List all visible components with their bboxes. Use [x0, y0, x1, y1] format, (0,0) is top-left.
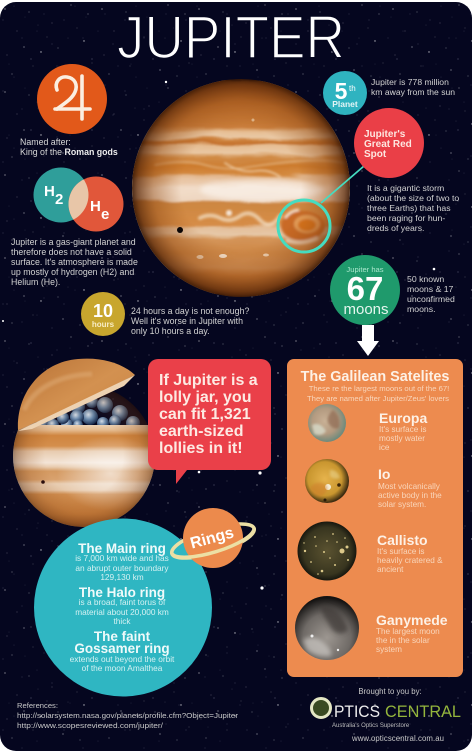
moon: Europa: It's surface is — [379, 425, 427, 434]
logo: Optics Central: www.opticscentral.com.au — [351, 734, 444, 743]
moon: Ganymede: the in the solar — [376, 636, 430, 645]
moon: Europa: Europa — [379, 410, 427, 426]
venn: hydrogen and helium — [34, 168, 124, 232]
venn: hydrogen and helium: H — [44, 183, 55, 200]
text: references: References: — [17, 701, 58, 710]
lower body — [13, 392, 154, 527]
text: distance from sun: Jupiter is 778 million — [371, 77, 449, 87]
callout: lolly jar speech bubble: If Jupiter is a — [159, 372, 258, 389]
text: day length: 24 hours a day is not enough? — [131, 306, 249, 316]
moon: Io: solar system. — [378, 500, 426, 509]
text: gas giant description: up mostly of hydrogen (H2) and — [11, 267, 134, 277]
badge: Great Red Spot: Jupiter's — [364, 129, 406, 140]
badge: 10 hours: 10 — [93, 301, 113, 321]
badge: 5th planet: th — [349, 84, 356, 93]
text: day length: Well it's worse in Jupiter with — [131, 316, 243, 326]
venn: hydrogen and helium: 2 — [55, 191, 63, 208]
title: JUPITER — [117, 4, 345, 71]
badge: Jupiter symbol — [37, 64, 107, 134]
callout: Great Red Spot pointer ring — [278, 166, 364, 252]
text: known moons: moons. — [407, 304, 436, 314]
badge: Great Red Spot: Great Red — [364, 139, 412, 150]
moon: Io: active body in the — [378, 491, 442, 500]
badge: 5th planet: 5 — [335, 78, 348, 104]
red spot — [281, 210, 325, 243]
illustration: Jupiter lolly jar — [10, 359, 160, 530]
badge: 5th planet: Planet — [332, 99, 358, 109]
logo: Optics Central: CENTRAL — [385, 702, 461, 721]
logo: Optics Central: PTICS — [334, 702, 380, 721]
callout: lolly jar speech bubble: lollies in it! — [159, 440, 243, 457]
moon: Ganymede: system — [376, 645, 402, 654]
panel: rings — [34, 518, 212, 696]
badge: 67 moons: 67 — [347, 270, 383, 307]
callout: lolly jar speech bubble: earth-sized — [159, 423, 243, 440]
earth lollies — [26, 396, 140, 434]
text: gas giant description: Helium (He). — [11, 277, 60, 287]
badge: 5th planet — [323, 71, 367, 115]
logo: Optics Central: Australia's Optics Superstore — [332, 723, 410, 729]
badge: 10 hours: hours — [92, 320, 115, 329]
moon: Europa — [308, 404, 427, 452]
badge: Great Red Spot — [354, 108, 424, 178]
moon: Callisto: It's surface is — [377, 547, 425, 556]
panel: Galilean satellites: They are named after Jupiter/Zeus' lovers — [307, 394, 449, 403]
icon: ringed planet — [168, 508, 258, 568]
text: storm description: three Earths) that has — [367, 203, 451, 213]
callout: lolly jar speech bubble: lolly jar, you — [159, 389, 251, 406]
panel: rings: material about 20,000 km — [75, 607, 169, 617]
text: gas giant description: therefore does not have a solid — [11, 247, 132, 257]
moon: Europa: ice — [379, 443, 390, 452]
panel: rings: Gossamer ring — [74, 641, 170, 656]
callout: lolly jar speech bubble — [148, 359, 271, 484]
text: gas giant description: Jupiter is a gas-giant planet and — [11, 237, 136, 247]
text: storm description: (about the size of two to — [367, 193, 459, 203]
panel: rings: The Main ring — [78, 541, 166, 556]
icon: ringed planet: Rings — [188, 524, 236, 552]
logo: Optics Central — [312, 687, 461, 743]
panel: Galilean satellites: These re the largest moons out of the 67! — [309, 384, 449, 393]
panel: rings: The Halo ring — [79, 585, 165, 600]
panel: rings: The faint — [94, 629, 151, 644]
text: storm description: It is a gigantic storm — [367, 183, 444, 193]
moon: Io: Io — [378, 466, 390, 482]
callout: lolly jar speech bubble: can fit 1,321 — [159, 406, 251, 423]
panel: rings: 129,130 km — [100, 572, 144, 582]
illustration: Jupiter planet — [122, 79, 360, 297]
moon: Ganymede: Ganymede — [376, 612, 448, 628]
moon: Callisto: heavily cratered & — [377, 556, 443, 565]
panel: Galilean satellites — [287, 359, 463, 677]
panel: rings: extends out beyond the orbit — [70, 654, 175, 664]
logo: Optics Central: Brought to you by: — [358, 687, 422, 696]
text: known moons: moons & 17 — [407, 284, 454, 294]
moon: Ganymede: The largest moon — [376, 627, 440, 636]
text: storm description: been raging for hun- — [367, 213, 445, 223]
moon: Callisto — [298, 522, 443, 580]
badge: 67 moons: Jupiter has — [346, 265, 384, 274]
panel: rings: is a broad, faint torus of — [79, 597, 166, 607]
moon: Io: Most volcanically — [378, 482, 441, 491]
moon: Europa: mostly water — [379, 434, 425, 443]
text: references: http://solarsystem.nasa.gov/planets/profile.cfm?Object=Jupiter — [17, 711, 238, 720]
badge: 10 hours — [81, 292, 125, 336]
panel: Galilean satellites: The Galilean Satelites — [301, 369, 449, 385]
text: gas giant description: surface. It's atmosphere is made — [11, 257, 138, 267]
text: references: http://www.scopesreviewed.com/jupiter/ — [17, 721, 164, 730]
panel: rings: is 7,000 km wide and has — [75, 553, 169, 563]
jar lid — [18, 359, 135, 430]
badge: Great Red Spot: Spot — [364, 149, 387, 160]
text: known moons: 50 known — [407, 274, 444, 284]
text: day length: only 10 hours a day. — [131, 326, 210, 336]
moon: Io — [305, 459, 442, 509]
venn: hydrogen and helium: e — [101, 206, 109, 223]
moon: Ganymede — [295, 596, 448, 660]
venn: hydrogen and helium: H — [90, 198, 101, 215]
moon: Callisto: Callisto — [377, 532, 428, 548]
arrow: down to moons panel — [357, 325, 379, 356]
moon: Callisto: ancient — [377, 565, 404, 574]
badge: 67 moons — [330, 255, 400, 325]
panel: rings: thick — [113, 616, 131, 626]
badge: 67 moons: moons — [343, 301, 389, 318]
text: named after: Named after: — [20, 137, 71, 147]
panel: rings: of the moon Amalthea — [82, 663, 163, 673]
moon shadow — [177, 227, 183, 233]
text: storm description: dreds of years. — [367, 223, 424, 233]
text: known moons: unconfirmed — [407, 294, 455, 304]
text: named after: King of the Roman gods — [20, 147, 118, 157]
text: distance from sun: km away from the sun — [371, 87, 455, 97]
panel: rings: an abrupt outer boundary — [75, 563, 169, 573]
